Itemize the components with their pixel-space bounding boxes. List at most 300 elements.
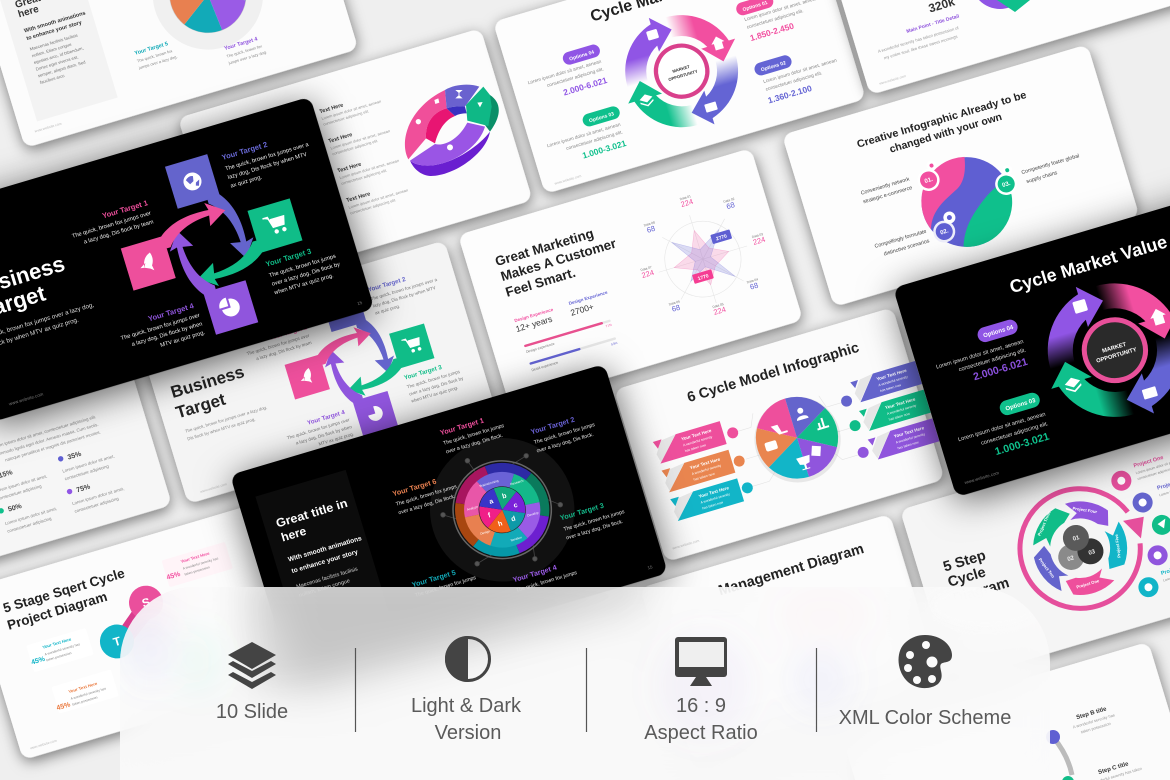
cycle arrows: MARKET xyxy=(672,64,691,74)
sidebar text: semper, aliquet diam, Sed xyxy=(37,59,87,78)
step labels: taken possession xyxy=(1080,721,1111,734)
target labels: Your Target 4 xyxy=(147,301,196,323)
cycle nodes: T xyxy=(111,634,123,649)
radar chart: 1770 xyxy=(697,273,710,282)
target labels: ax quiz prog. xyxy=(230,174,263,190)
left options: 1.000-3.021 xyxy=(581,138,628,161)
option 04: Lorem ipsum dolor sit amet, aenean xyxy=(935,339,1024,371)
sidebar text: Donec eget viverra est, xyxy=(35,54,79,72)
experience stats: Design Experience xyxy=(514,307,554,323)
text rows: Text Here xyxy=(346,191,371,204)
left options xyxy=(523,43,630,169)
slide: 6 cycle model xyxy=(614,306,950,562)
target labels: The quick, brown fox jumps xyxy=(269,254,337,279)
title: Makes A Customer xyxy=(499,236,618,284)
left ribbons: Your Text Here xyxy=(698,485,730,499)
cycle diagram: The quick, brown fox jumps over xyxy=(246,333,310,356)
s-curve circle: 01. xyxy=(924,177,934,185)
cycle diagram: lazy dog, Dis flock by when MTV xyxy=(372,285,436,309)
slide: 5 step cycle xyxy=(900,413,1170,682)
left ribbons: has taken now xyxy=(702,500,724,510)
target labels: Your Target 1 xyxy=(101,198,149,220)
radar chart: Data 06 xyxy=(668,299,681,307)
radar chart: 68 xyxy=(725,200,736,211)
left ribbons: has taken now xyxy=(684,443,707,453)
title xyxy=(493,220,623,300)
wheel diagram: a xyxy=(489,498,494,506)
cycle diagram: 02 xyxy=(1067,555,1076,563)
target labels: over a lazy dog, Dis flock by xyxy=(271,262,341,288)
target labels: Your Target 5 xyxy=(411,568,457,589)
text rows xyxy=(319,92,410,216)
target labels: lazy dog, Dis flock by when MTV xyxy=(227,152,308,181)
option 04 xyxy=(929,317,1031,393)
sidebar text: here xyxy=(17,4,41,20)
radar chart xyxy=(623,177,783,333)
footer url: www.website.com xyxy=(672,539,700,550)
sidebar text: nullam, Etiam congue xyxy=(31,42,73,58)
card: pink: Your Text Here xyxy=(180,551,211,564)
radar chart: 68 xyxy=(749,281,759,292)
target labels: Your Target 6 xyxy=(391,477,437,498)
cycle diagram: when MTV ax quiz prog. xyxy=(411,385,459,404)
target labels: The quick, brown fox xyxy=(226,43,263,59)
sidebar: Maecenas facilisis facilisis xyxy=(296,566,359,590)
text rows: Text Here xyxy=(328,132,353,145)
callout text: supply chains xyxy=(1026,170,1058,185)
target labels: jumps over a lazy dog. xyxy=(137,54,178,70)
cycle diagram: Your Target 2 xyxy=(367,276,407,294)
right ribbons: A wonderful serenity xyxy=(895,432,926,445)
title: 5 Stage Sqert Cycle xyxy=(1,565,127,616)
cycle arrows xyxy=(1025,261,1170,439)
left ribbons xyxy=(653,417,758,521)
slide: cycle market light xyxy=(493,0,866,194)
percent items: consectetuer adipiscing xyxy=(7,516,53,534)
sidebar text: egestas arcu, Id bibendum, xyxy=(33,45,84,65)
card: pink: A wonderful serenity has xyxy=(182,556,219,571)
title: Diagram xyxy=(951,575,1011,607)
left ribbons: Your Text Here xyxy=(681,428,712,442)
cycle diagram: The quick, brown fox jumps over a xyxy=(370,277,438,301)
target labels: a lazy dog, Dis flock by when xyxy=(131,321,203,348)
radar chart: 224 xyxy=(640,268,655,280)
step labels xyxy=(1069,702,1142,780)
left ribbons: has taken now xyxy=(693,472,716,482)
percent items: 75% xyxy=(76,483,92,494)
label: aspect ratio xyxy=(644,695,758,744)
target labels: Your Target 5 xyxy=(134,41,169,57)
card: orange: Your Text Here xyxy=(68,681,98,694)
icon: cart square xyxy=(247,198,302,253)
cycle diagram: MTV ax quiz prog. xyxy=(318,431,355,447)
text rows: consectetuer adipiscing elit. xyxy=(350,197,397,216)
slide: percentages list xyxy=(0,333,172,599)
slide: 320k statistic xyxy=(818,0,1170,95)
title: Cycle Market Value xyxy=(1007,232,1169,297)
target labels xyxy=(133,15,268,91)
cycle nodes: S xyxy=(140,595,152,610)
target labels xyxy=(371,382,654,636)
card: teal: 45% xyxy=(30,656,47,667)
intro paragraph: natoque penatibus et magnis dis parturient montes. xyxy=(4,429,101,463)
feature icons and labels xyxy=(180,587,1011,744)
percent items: 50% xyxy=(7,503,23,514)
left options: Lorem ipsum dolor sit amet, aenean xyxy=(527,59,603,86)
s-curve circle xyxy=(909,139,1032,258)
footer url: www.website.com xyxy=(554,174,582,186)
target labels: The quick, brown fox jumps over xyxy=(120,313,201,342)
cycle diagram: Project One xyxy=(1076,578,1100,590)
radar chart: 68 xyxy=(646,224,656,235)
pie wheel xyxy=(744,386,851,493)
sidebar text: to enhance your story xyxy=(26,20,84,42)
callout text: strategic e-commerce xyxy=(863,185,913,205)
cycle diagram: a lazy dog, Dis flock by when xyxy=(295,424,353,446)
right ribbons: A wonderful serenity xyxy=(878,375,908,387)
footer: www.website.com xyxy=(8,391,44,406)
cycle diagram: Your Target 3 xyxy=(403,364,443,382)
label: aspect ratio: Aspect Ratio xyxy=(644,722,758,744)
option 03: Lorem ipsum dolor sit amet, aenean xyxy=(957,412,1046,443)
right ribbons: Your Text Here xyxy=(876,368,908,382)
title: 5 Step xyxy=(941,548,988,575)
title: Management Diagram xyxy=(717,541,866,599)
title: changed with your own xyxy=(888,112,1003,156)
cycle diagram: Project Four xyxy=(1072,506,1098,514)
radar chart: Data 05 xyxy=(712,302,724,309)
wheel diagram: Design xyxy=(480,529,491,536)
wheel diagram: Iteration xyxy=(510,535,523,542)
target labels: Your Target 1 xyxy=(439,416,485,437)
progress bars: 71% xyxy=(605,323,613,328)
cycle diagram: 03 xyxy=(1088,549,1097,557)
option 03: 1.000-3.021 xyxy=(994,432,1051,458)
title: Project Diagram xyxy=(5,589,109,633)
radar chart: 224 xyxy=(752,235,766,247)
text rows: Lorem ipsum dolor sit amet, aenean xyxy=(339,158,400,180)
sidebar xyxy=(255,470,396,661)
cycle diagram: The quick, brown fox jumps over xyxy=(286,417,351,440)
wheel diagram: Research xyxy=(510,479,524,486)
right options xyxy=(735,0,844,107)
target labels: The quick, brown fox jumps xyxy=(414,575,477,599)
cycle diagram: over a lazy dog, Dis flock by xyxy=(408,376,465,397)
radar chart: Data 01 xyxy=(679,194,692,201)
label: xml color scheme: XML Color Scheme xyxy=(839,707,1011,729)
label: aspect ratio: 16 : 9 xyxy=(676,695,726,717)
card: teal: taken possession xyxy=(46,651,72,662)
target labels: when MTV ax quiz prog. xyxy=(273,273,335,297)
target labels: The quick, brown fox xyxy=(136,48,173,63)
cycle diagram: Project Five xyxy=(1114,533,1122,558)
target labels: The quick, brown fox jumps xyxy=(443,423,505,447)
label: light and dark xyxy=(411,695,522,744)
slide: wheel dark xyxy=(230,364,668,684)
left ribbons: A wonderful serenity xyxy=(691,463,722,476)
right ribbons: Your Text Here xyxy=(885,396,916,410)
card: orange: 45% xyxy=(56,701,72,712)
wheel diagram xyxy=(412,420,592,599)
percent items xyxy=(0,440,127,534)
slide: business target dark xyxy=(0,97,374,422)
target labels: The quick, brown fox jumps xyxy=(395,484,458,508)
target labels: a lazy dog, Dis flock by team xyxy=(83,219,155,246)
icon: monitor xyxy=(675,637,727,686)
sidebar panel xyxy=(0,0,118,121)
card: teal xyxy=(26,628,94,672)
description xyxy=(181,405,286,494)
cycle arrows: OPPORTUNITY xyxy=(1096,347,1138,365)
target labels: over a lazy dog, Dis flock. xyxy=(566,519,624,541)
sidebar text: faucibus arcu xyxy=(39,73,66,85)
card: pink xyxy=(162,542,233,587)
footer xyxy=(8,297,363,409)
cycle diagram: Project Three xyxy=(1037,510,1052,537)
title: Great Marketing xyxy=(493,226,595,269)
progress bars: 53% xyxy=(611,341,618,347)
target labels: The quick, brown fox jumps xyxy=(515,570,578,594)
text rows: consectetuer adipiscing elit. xyxy=(341,168,388,186)
title: Feel Smart. xyxy=(504,265,577,300)
cycle nodes xyxy=(87,582,176,663)
right options: consectetuer adipiscing elit. xyxy=(765,70,823,93)
experience stats: Design Experience xyxy=(568,290,609,306)
target labels: The quick, brown fox jumps over xyxy=(71,211,152,240)
cycle diagram: 01 xyxy=(1072,535,1081,543)
radar chart: Data 07 xyxy=(640,265,652,272)
wheel diagram: Analyze xyxy=(466,505,479,512)
cycle diagram xyxy=(1005,471,1165,623)
text rows: consectetuer adipiscing elit. xyxy=(323,108,370,127)
step labels: A wonderful serenity has xyxy=(1072,712,1115,730)
right options: 1.360-2.100 xyxy=(767,83,813,105)
cycle diagram: Your Target 4 xyxy=(306,409,346,427)
title: Target xyxy=(174,390,228,422)
left options: 2.000-6.021 xyxy=(562,75,609,98)
text rows: Lorem ipsum dolor sit amet, aenean xyxy=(321,99,382,121)
target labels: The quick, brown fox jumps xyxy=(533,422,596,446)
text rows: Text Here xyxy=(337,162,362,174)
slide: business target light xyxy=(136,241,496,504)
slide: wheel light version top left xyxy=(0,0,358,148)
intro paragraph xyxy=(0,414,101,465)
target labels: Your Target 3 xyxy=(559,501,605,522)
wheel diagram: c xyxy=(513,502,519,510)
callout text: distinctive scenarios xyxy=(883,238,931,258)
text rows: Lorem ipsum dolor sit amet, aenean xyxy=(330,128,391,151)
slide: 3D donut list xyxy=(178,28,533,290)
target labels: jumps over a lazy dog. xyxy=(227,49,268,66)
footer: 15 xyxy=(357,300,363,306)
left ribbons: A wonderful serenity xyxy=(700,492,731,505)
callout text xyxy=(858,128,1091,259)
statistic: www.website.com xyxy=(879,74,907,86)
icon: globe square xyxy=(165,154,220,209)
right ribbons: Your Text Here xyxy=(893,425,925,439)
cycle diagram: ax quiz prog. xyxy=(374,303,401,316)
right options: consectetuer adipiscing elit. xyxy=(746,8,804,31)
right options: Lorem ipsum dolor sit amet, aenean xyxy=(763,58,838,85)
wheel diagram: d xyxy=(510,515,517,523)
icon: rocket square xyxy=(121,236,176,291)
radar chart: 68 xyxy=(671,303,681,314)
cycle diagram: a lazy dog, Dis flock by team xyxy=(255,340,312,361)
icon: light dark contrast xyxy=(445,636,490,682)
wheel diagram: h xyxy=(497,520,503,528)
label: 10 slide: 10 Slide xyxy=(216,701,288,723)
card: orange: taken possession xyxy=(72,695,98,707)
left options: consectetuer adipiscing elit. xyxy=(566,129,624,152)
option 04: consectetuer adipiscing elit. xyxy=(958,348,1027,373)
option 04: 2.000-6.021 xyxy=(972,357,1029,383)
slide: management diagram xyxy=(640,514,942,760)
title xyxy=(941,544,1011,607)
target labels: Your Target 2 xyxy=(221,140,268,162)
target labels: Your Target 4 xyxy=(512,563,558,584)
icon: 3D donut xyxy=(405,85,499,176)
target labels: over a lazy dog, Dis flock. xyxy=(398,494,456,516)
description: Dis flock by when MTV ax quiz prog. xyxy=(187,417,256,441)
progress bars xyxy=(524,319,619,372)
target labels: The quick, brown fox jumps xyxy=(563,509,626,533)
sidebar text: www.website.com xyxy=(34,122,62,133)
radar chart: 2770 xyxy=(715,233,728,242)
percent items: Lorem ipsum dolor sit amet, xyxy=(72,486,125,506)
percent items: Lorem ipsum dolor sit amet, xyxy=(4,506,58,526)
right ribbons: has taken now xyxy=(897,440,920,450)
target labels: MTV ax quiz prog. xyxy=(160,330,206,349)
target labels: over a lazy dog, Dis flock. xyxy=(536,432,594,454)
step labels: Step B title xyxy=(1076,706,1108,721)
right ribbons xyxy=(836,361,939,465)
cycle arrows xyxy=(606,0,757,146)
arc fragment xyxy=(1046,730,1074,780)
sidebar: With smooth animations xyxy=(287,535,363,564)
statistic: A wonderful serenity has taken possession of xyxy=(877,25,960,54)
text rows: Text Here xyxy=(319,103,344,115)
title xyxy=(168,362,253,422)
radar chart: Data 02 xyxy=(723,197,735,204)
wheel diagram: Brainstorming xyxy=(479,479,499,488)
s-curve circle: 02. xyxy=(940,228,950,237)
wheel diagram: f xyxy=(487,512,492,520)
project nodes: Project One xyxy=(1133,455,1164,469)
option 03: Options 03 xyxy=(1005,398,1037,412)
card: teal: Your Text Here xyxy=(42,636,72,650)
statistic: Main Point - Title Detail xyxy=(906,13,961,35)
title: Cycle xyxy=(946,564,988,591)
radar chart: Data 08 xyxy=(643,220,656,228)
right options: Options 02 xyxy=(760,60,787,73)
title: Business xyxy=(168,362,247,402)
target labels: Your Target 2 xyxy=(530,415,576,436)
sidebar: Great title in xyxy=(274,496,349,530)
cycle diagram: The quick, brown fox jumps xyxy=(406,369,461,389)
left options: Options 03 xyxy=(588,111,615,124)
description: www.website.com xyxy=(200,482,228,494)
footer url: www.website.com xyxy=(30,739,57,750)
slide: cycle market dark xyxy=(893,174,1170,497)
progress bars: Detail experience xyxy=(531,361,559,372)
slide: 5 stage sqert cycle xyxy=(0,490,354,760)
experience stats xyxy=(512,290,612,334)
left options: consectetuer adipiscing elit. xyxy=(546,66,605,89)
card: pink: 45% xyxy=(166,571,182,582)
footer url: www.website.com xyxy=(964,470,1000,485)
title: 6 Cycle Model Infographic xyxy=(685,340,861,406)
target labels: Your Target 3 xyxy=(264,247,312,269)
percent items: Lorem ipsum dolor sit amet, xyxy=(62,454,115,474)
radar chart: Data 04 xyxy=(746,277,759,284)
target labels: The quick, brown fox jumps over a xyxy=(225,142,310,172)
slide: great marketing radar xyxy=(458,148,803,407)
right ribbons: has taken now xyxy=(888,412,911,422)
arrows xyxy=(154,187,269,302)
title xyxy=(0,251,74,325)
chart fragment top right xyxy=(971,0,1030,12)
sidebar text: With smooth animations xyxy=(24,11,86,34)
sidebar: nullam, Etiam congue xyxy=(298,578,351,599)
left ribbons: Your Text Here xyxy=(689,456,721,470)
wheel diagram: Develop xyxy=(527,511,539,518)
statistic: my entire soul, like these sweet mornings xyxy=(883,34,958,60)
slide: creative infographic xyxy=(782,44,1139,307)
callout text: Conveniently network xyxy=(860,176,911,197)
card: pink: taken possession xyxy=(184,565,210,576)
text rows: Lorem ipsum dolor sit amet, aenean xyxy=(348,187,409,210)
left options: Options 04 xyxy=(569,49,595,63)
statistic xyxy=(861,0,972,86)
progress bars: Design experience xyxy=(525,342,555,354)
left options: Lorem ipsum dolor sit amet, aenean xyxy=(546,122,622,149)
target labels: 15 xyxy=(647,564,654,570)
percent items: consectetuer adipiscing xyxy=(64,463,110,481)
connectors xyxy=(732,388,858,486)
target labels: Your Target 4 xyxy=(224,36,259,52)
icon: pie square xyxy=(203,280,258,335)
label: light and dark: Version xyxy=(435,722,501,744)
radar chart: 224 xyxy=(712,305,727,317)
description: The quick, brown fox jumps over a lazy dog, xyxy=(184,405,268,434)
sidebar: to enhance your story xyxy=(291,549,359,575)
callout text: Compellingly formulate xyxy=(874,229,927,250)
label: light and dark: Light & Dark xyxy=(411,695,522,717)
text rows: consectetuer adipiscing elit. xyxy=(332,138,379,156)
card: teal: A wonderful serenity has xyxy=(44,642,81,657)
cycle diagram: Project Two xyxy=(1038,557,1056,579)
slide: step titles xyxy=(841,642,1170,780)
cycle arrows: OPPORTUNITY xyxy=(668,69,698,82)
icon: layers xyxy=(228,642,276,689)
left ribbons: A wonderful serenity xyxy=(683,435,713,447)
target labels: over a lazy dog, Dis flock. xyxy=(445,433,504,455)
sidebar: here xyxy=(279,524,308,544)
sidebar text: Maecenas facilisis facilisis xyxy=(29,33,78,52)
right ribbons: A wonderful serenity xyxy=(887,403,917,416)
percent items: consectetuer adipiscing xyxy=(74,496,120,514)
step labels: Step C title xyxy=(1098,761,1130,776)
option 03 xyxy=(951,391,1054,467)
percent items: 35% xyxy=(67,451,83,462)
cycle diagram xyxy=(237,264,475,461)
experience stats: 12+ years xyxy=(514,314,553,334)
radar chart: Data 03 xyxy=(751,232,764,239)
title: Creative Infographic Already to be xyxy=(856,90,1028,151)
right options: Options 01 xyxy=(742,0,769,13)
experience stats: 2700+ xyxy=(569,301,595,318)
wheel light xyxy=(139,0,277,63)
